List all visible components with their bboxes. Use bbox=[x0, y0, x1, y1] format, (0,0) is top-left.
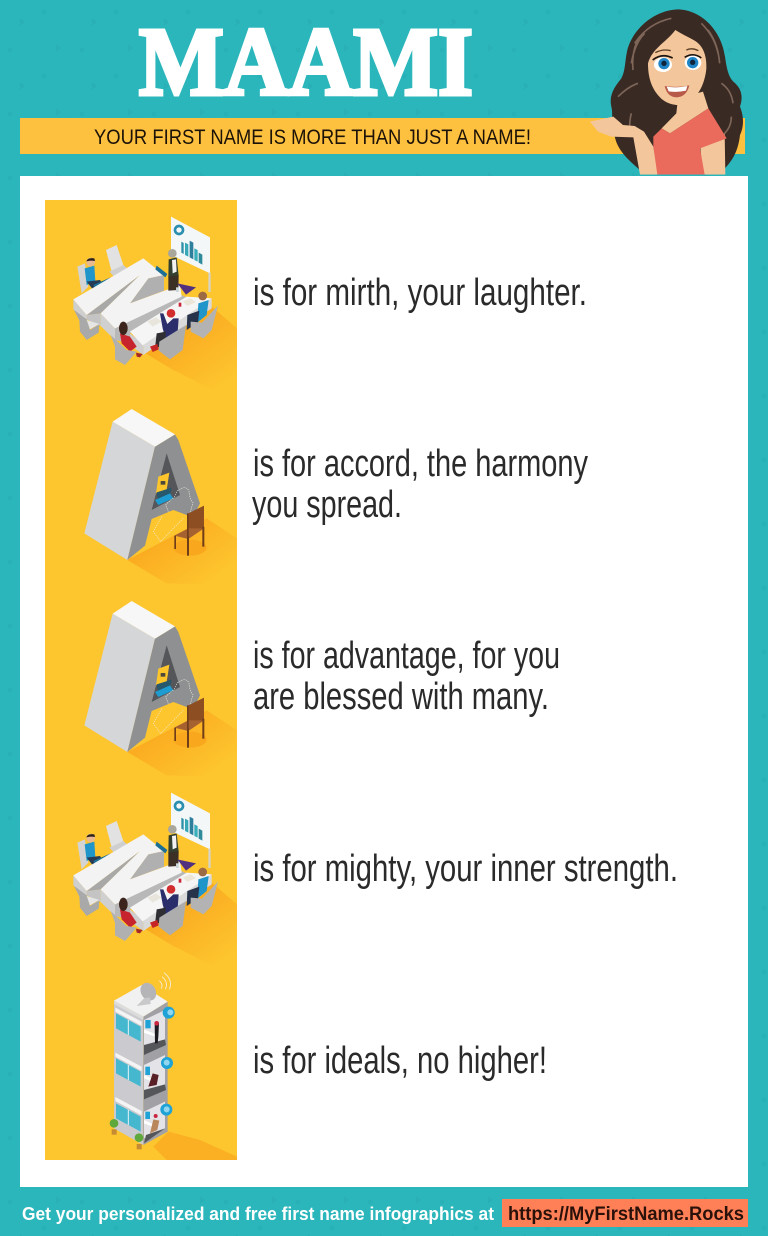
icon: letter A desk and chair bbox=[84, 409, 237, 585]
text: letter A accord: you spread. bbox=[252, 484, 402, 526]
yellow illustration column bbox=[45, 200, 237, 1160]
subtitle banner bbox=[20, 118, 745, 154]
text: letter M mirth: is for mirth, your laughter. bbox=[253, 272, 587, 314]
icon: letter I office tower bbox=[110, 973, 237, 1160]
text: letter A advantage: are blessed with many. bbox=[253, 676, 549, 718]
footer link badge: https://MyFirstName.Rocks bbox=[508, 1204, 744, 1225]
text: letter A accord: is for accord, the harmony bbox=[253, 443, 588, 485]
illustration: smiling woman bbox=[590, 9, 743, 175]
text: letter A accord bbox=[252, 443, 588, 526]
icon: letter M meeting table bbox=[73, 217, 237, 395]
text: letter I ideals: is for ideals, no higher! bbox=[253, 1040, 547, 1082]
white content panel bbox=[20, 176, 748, 1187]
icon: second letter M meeting table bbox=[73, 793, 237, 971]
subtitle banner: YOUR FIRST NAME IS MORE THAN JUST A NAME! bbox=[94, 126, 531, 149]
text: letter A advantage bbox=[253, 635, 560, 718]
icon: second letter A desk and chair bbox=[84, 601, 237, 777]
footer call to action: Get your personalized and free first name infographics at bbox=[22, 1204, 494, 1224]
text: letter A advantage: is for advantage, for you bbox=[253, 635, 560, 677]
title: MAAMI bbox=[139, 8, 473, 116]
